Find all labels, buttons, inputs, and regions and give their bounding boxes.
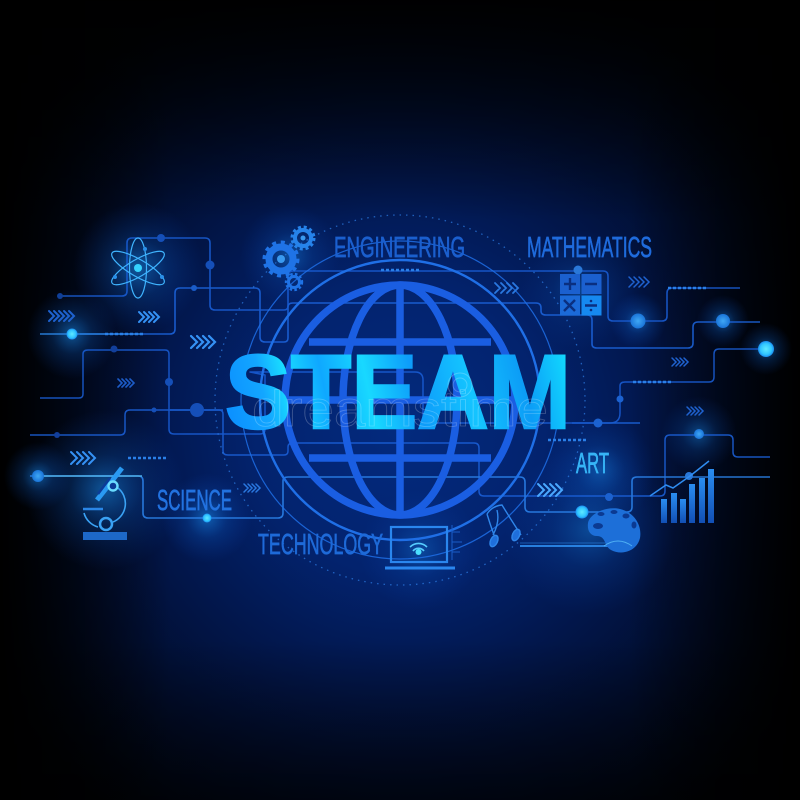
small gear <box>292 227 314 249</box>
globe sphere <box>285 285 515 515</box>
label: art: ART <box>576 448 609 480</box>
label: mathematics: MATHEMATICS <box>527 232 652 264</box>
icon: atom <box>108 238 168 298</box>
dashed segments <box>105 270 708 458</box>
ambient glows <box>4 203 792 615</box>
label: engineering: ENGINEERING <box>334 232 465 264</box>
circuit nodes <box>32 234 774 522</box>
outer dotted ring <box>215 215 585 585</box>
watermark: dreamstime <box>252 381 548 437</box>
label: science: SCIENCE <box>157 485 232 517</box>
thin rings <box>241 241 559 559</box>
tiny gear <box>286 274 302 290</box>
circuit lines <box>30 238 770 546</box>
icon: laptop with wifi <box>385 525 462 568</box>
icon: paint palette <box>588 508 640 553</box>
icon: bar chart with trend <box>650 461 714 523</box>
icon: microscope <box>83 468 127 540</box>
icon: music notes <box>487 505 522 548</box>
label: technology: TECHNOLOGY <box>258 529 383 561</box>
icon: calculator <box>560 274 602 316</box>
large gear <box>264 242 298 276</box>
chevron arrows <box>49 277 703 496</box>
globe with rings <box>215 215 585 585</box>
title: STEAM: STEAM <box>225 334 571 451</box>
icon: gears <box>264 227 314 290</box>
